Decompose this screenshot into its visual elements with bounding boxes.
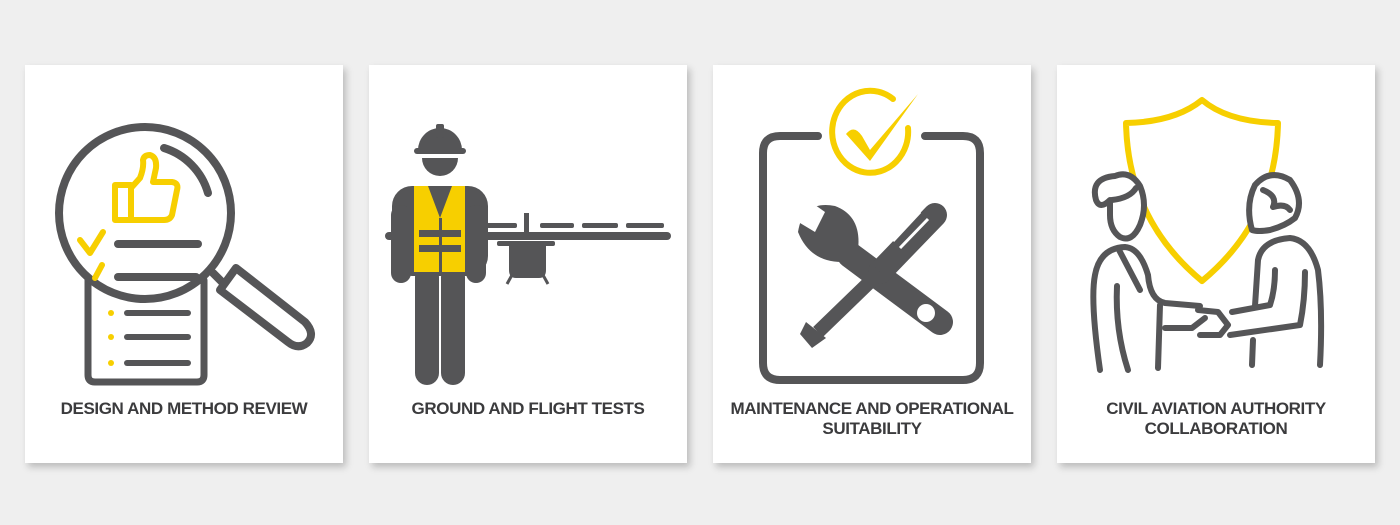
label: civil aviation	[1106, 399, 1326, 438]
panel: ground and flight tests	[369, 65, 687, 463]
icon: worker with drone	[385, 124, 671, 385]
label: maintenance: SUITABILITY	[822, 419, 922, 438]
label: civil aviation: COLLABORATION	[1145, 419, 1287, 438]
panel: maintenance	[713, 65, 1031, 463]
panel: civil aviation	[1057, 65, 1375, 463]
icon: clipboard with tools	[763, 91, 980, 380]
panel: design and method review	[25, 65, 343, 463]
label: civil aviation: CIVIL AVIATION AUTHORITY	[1106, 399, 1326, 418]
label: maintenance	[731, 399, 1014, 438]
icon: magnifier over document	[59, 127, 311, 382]
label: maintenance: MAINTENANCE AND OPERATIONAL	[731, 399, 1013, 418]
icon: shield and handshake	[1093, 100, 1321, 370]
label: design and method review: DESIGN AND METHOD REVIEW	[61, 399, 307, 418]
label: ground and flight tests: GROUND AND FLIGHT TESTS	[412, 399, 644, 418]
